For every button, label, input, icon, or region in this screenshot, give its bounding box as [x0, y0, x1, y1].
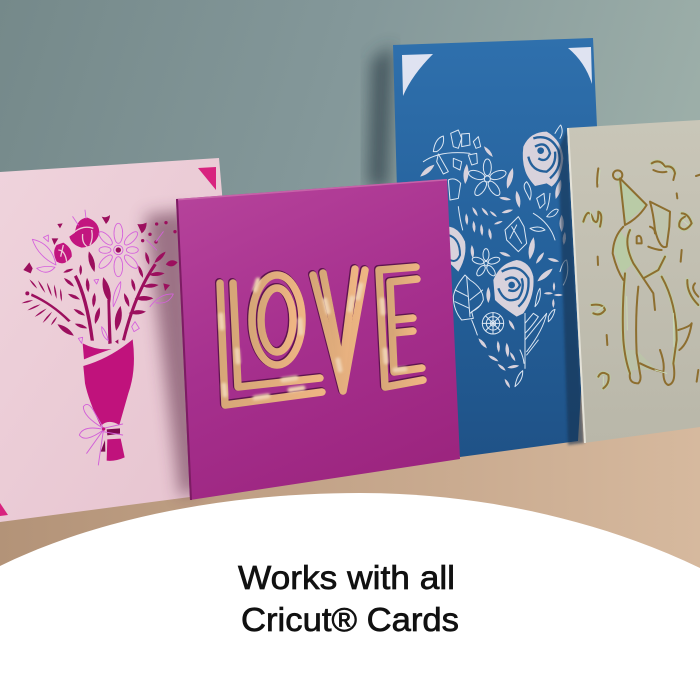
dark leaves and stems — [21, 215, 178, 344]
shadow cast by plum card — [145, 210, 200, 497]
gold cut lines — [583, 161, 700, 388]
table surface — [0, 380, 700, 700]
dog illustration with party hat and confetti — [583, 161, 700, 388]
rose top right — [523, 132, 563, 187]
bouquet cutout — [21, 210, 178, 465]
wall background — [0, 0, 700, 560]
corner slots — [198, 167, 216, 190]
caption heading: Works with all — [238, 559, 455, 596]
caption heading: Cricut® Cards — [241, 601, 459, 638]
white drawn floral lines — [423, 125, 568, 387]
panel: plum LOVE card — [176, 179, 460, 500]
caption heading — [238, 559, 459, 638]
glitter underlay of lines — [583, 161, 698, 388]
foil flecks — [221, 280, 405, 398]
shadow beside grey card — [558, 128, 584, 445]
corner slots — [402, 47, 592, 96]
panel: blue heart card — [368, 38, 597, 457]
rose petal lines — [58, 227, 93, 262]
shimmer highlights — [590, 165, 688, 385]
panel: grey dog card — [567, 120, 700, 443]
ribbon — [79, 404, 123, 465]
white curved caption panel — [0, 493, 700, 700]
rose under plum card — [447, 227, 465, 272]
wrap — [83, 339, 134, 461]
violet outlines: daisy, leaves, hearts — [32, 210, 173, 343]
LOVE cutout lettering — [219, 266, 423, 405]
panel: pink bouquet card — [0, 158, 232, 522]
glitter — [613, 173, 669, 370]
heart cutout design — [419, 125, 568, 389]
rose bottom centre — [493, 260, 534, 317]
